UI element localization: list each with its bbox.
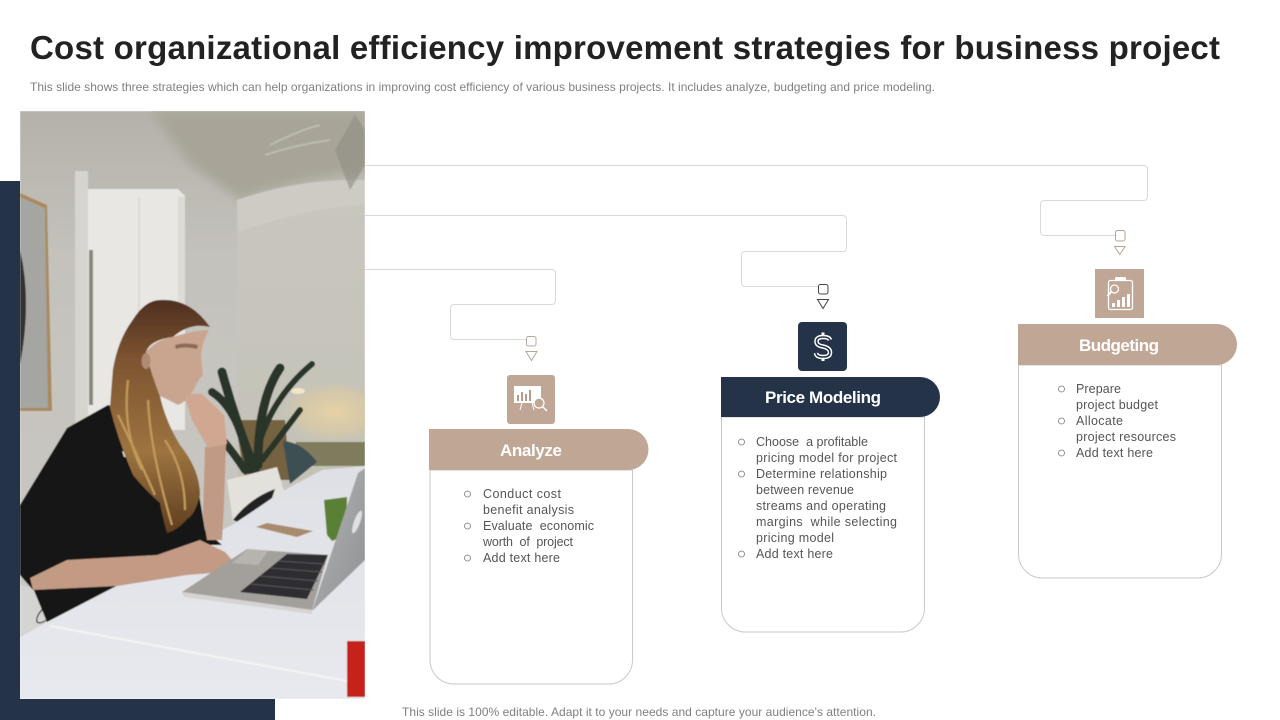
- strategy: price modeling: [721, 284, 940, 632]
- header: price modeling: [721, 377, 940, 417]
- connector arrow: [526, 352, 537, 360]
- card body: [430, 470, 632, 684]
- icon: dollar sign: [798, 322, 847, 371]
- connector node: [818, 284, 828, 294]
- header: analyze: Analyze: [500, 441, 562, 460]
- header: analyze: [429, 429, 648, 470]
- bullet list: margins while selecting: [756, 515, 897, 529]
- bullet list: benefit analysis: [483, 503, 574, 517]
- navy backdrop panel: [0, 181, 275, 720]
- bullet list: Prepare: [1076, 382, 1121, 396]
- connector node: [526, 336, 536, 346]
- card body: [722, 417, 924, 632]
- bullet list: [738, 435, 898, 561]
- strategy: analyze: [429, 336, 648, 684]
- connector: price modeling: [365, 216, 846, 286]
- subtitle: This slide shows three strategies which can help organizations in improving cost efficiency of various business projects. It includes analyze, budgeting and price modeling.: [30, 80, 935, 94]
- connector: analyze: [365, 270, 556, 340]
- bullet list: streams and operating: [756, 499, 886, 513]
- header: price modeling: Price Modeling: [765, 388, 881, 407]
- bullet list: project budget: [1076, 398, 1159, 412]
- connector arrow: [1114, 246, 1125, 254]
- card body: [1018, 365, 1222, 578]
- bullet list: Choose a profitable: [756, 435, 868, 449]
- header: budgeting: [1018, 324, 1237, 365]
- title: Cost organizational efficiency improvement strategies for business project: [30, 29, 1220, 66]
- icon: presentation chart with magnifier: [507, 375, 555, 424]
- footer note: This slide is 100% editable. Adapt it to your needs and capture your audience's attention.: [402, 705, 876, 719]
- bullet list: project resources: [1076, 430, 1176, 444]
- bullet list: Allocate: [1076, 414, 1123, 428]
- bullet list: Add text here: [1076, 446, 1153, 460]
- bullet list: Add text here: [756, 547, 833, 561]
- connector arrow: [818, 300, 828, 308]
- bullet list: Conduct cost: [483, 487, 562, 501]
- bullet list: Determine relationship: [756, 467, 887, 481]
- connector: budgeting: [365, 166, 1148, 236]
- bullet list: [464, 487, 594, 565]
- photo: woman working on laptop: [20, 111, 390, 699]
- header: budgeting: Budgeting: [1079, 336, 1159, 355]
- bullet list: pricing model for project: [756, 451, 898, 465]
- bullet list: [1058, 382, 1176, 460]
- strategy: budgeting: [1018, 230, 1237, 578]
- bullet list: between revenue: [756, 483, 854, 497]
- icon: clipboard with bar chart: [1095, 269, 1144, 318]
- bullet list: Add text here: [483, 551, 560, 565]
- bullet list: Evaluate economic: [483, 519, 594, 533]
- bullet list: worth of project: [482, 535, 574, 549]
- connector node: [1116, 230, 1125, 241]
- bullet list: pricing model: [756, 531, 834, 545]
